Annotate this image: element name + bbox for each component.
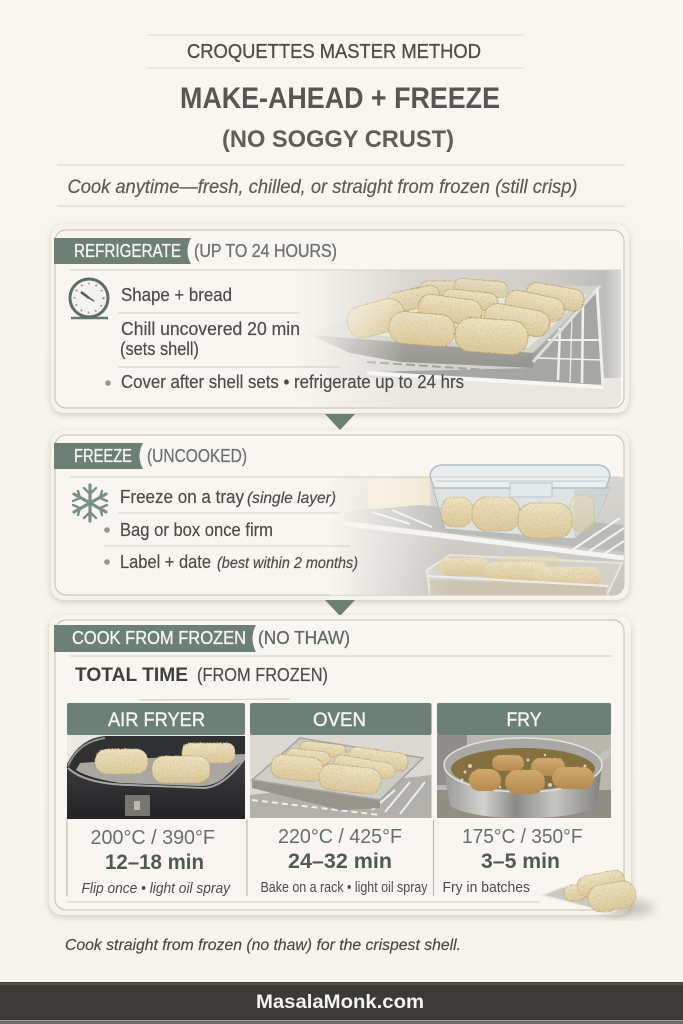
steps text: Freeze on a tray [120, 487, 244, 507]
tagline: Cook anytime—fresh, chilled, or straight from frozen (still crisp) [68, 177, 578, 198]
steps text: (sets shell) [120, 339, 199, 359]
top container [430, 465, 610, 539]
section label: (NO THAW) [258, 628, 350, 648]
column: oven: Bake on a rack • light oil spray [260, 879, 428, 896]
steps text: (best within 2 months) [217, 555, 358, 572]
steps text: (single layer) [247, 490, 336, 507]
photo: croquettes on tray in fridge [296, 270, 621, 407]
photo: air fryer [67, 735, 245, 819]
header [57, 35, 625, 206]
column: air fryer: Flip once • light oil spray [82, 880, 231, 897]
photo: containers on freezer shelves [330, 477, 624, 595]
footer bar: MasalaMonk.com [256, 991, 424, 1013]
panel: freeze [51, 430, 629, 600]
icon: timer clock [70, 279, 108, 318]
panel: cook from frozen [49, 615, 654, 916]
column: oven [250, 703, 432, 896]
steps text: Bag or box once firm [120, 520, 273, 540]
section label: COOK FROM FROZEN [72, 628, 246, 648]
arrow [325, 600, 355, 616]
section label: (UP TO 24 HOURS) [194, 241, 337, 261]
column: fry: FRY [506, 709, 542, 731]
column: air fryer: 200°C / 390°F [90, 826, 215, 849]
total time heading [75, 664, 328, 686]
column: oven: 220°C / 425°F [278, 825, 402, 848]
total time heading: (FROM FROZEN) [197, 664, 328, 685]
column: fry [437, 703, 611, 896]
steps text: Cover after shell sets • refrigerate up to 24 hrs [121, 372, 464, 392]
section label: REFRIGERATE [74, 241, 181, 261]
section label [54, 238, 337, 264]
photo: frying pan [437, 735, 611, 818]
icon: snowflake [73, 485, 107, 521]
subtitle: (NO SOGGY CRUST) [222, 126, 454, 153]
arrow [325, 414, 355, 430]
eyebrow heading: CROQUETTES MASTER METHOD [187, 40, 481, 63]
section label [54, 625, 350, 652]
illustration: croquettes on small rack [542, 868, 654, 916]
total time heading: TOTAL TIME [75, 665, 188, 686]
section label: (UNCOOKED) [147, 446, 247, 466]
photo: oven tray [250, 735, 432, 818]
steps text: Label + date [120, 552, 211, 572]
column: air fryer: 12–18 min [105, 850, 204, 874]
column: fry: 3–5 min [481, 849, 560, 873]
column: fry: 175°C / 350°F [462, 825, 582, 848]
section label: FREEZE [74, 446, 132, 466]
column: air fryer [67, 703, 245, 897]
closing note: Cook straight from frozen (no thaw) for the crispest shell. [65, 937, 461, 954]
lower container [427, 555, 622, 595]
steps text [104, 487, 358, 572]
title: MAKE-AHEAD + FREEZE [180, 82, 500, 115]
steps text: Chill uncovered 20 min [121, 319, 300, 339]
column: fry: Fry in batches [442, 879, 530, 896]
steps text: Shape + bread [121, 285, 232, 305]
footer bar [0, 982, 683, 1024]
column: air fryer: AIR FRYER [108, 709, 205, 731]
steps text [105, 285, 464, 392]
panel: refrigerate [51, 224, 629, 413]
column: oven: 24–32 min [288, 849, 392, 873]
column: oven: OVEN [313, 709, 366, 731]
section label [54, 443, 247, 469]
